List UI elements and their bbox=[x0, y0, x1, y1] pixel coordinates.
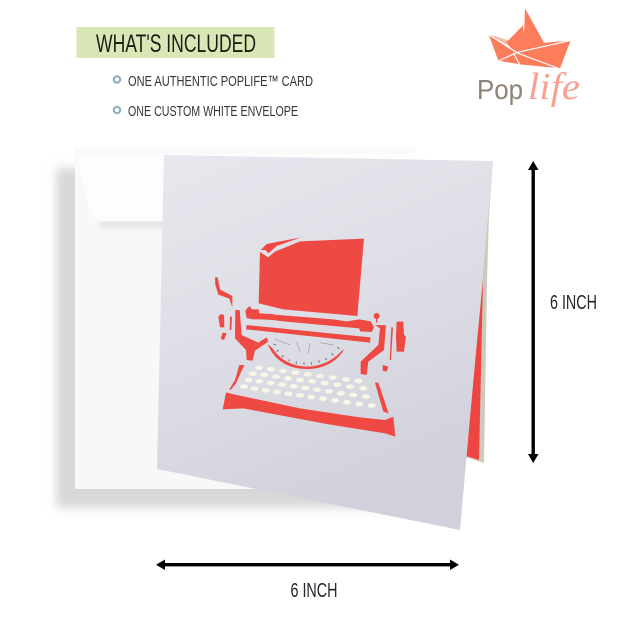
list of included items: ONE CUSTOM WHITE ENVELOPE bbox=[128, 103, 298, 120]
typewriter cut-out bbox=[215, 237, 406, 437]
keys bbox=[240, 365, 376, 408]
left sliver bbox=[230, 317, 232, 330]
list of included items bbox=[114, 73, 313, 120]
envelope shadow bbox=[56, 168, 406, 508]
carriage bar bbox=[246, 325, 371, 343]
envelope bbox=[75, 147, 415, 489]
heading: what's included: WHAT'S INCLUDED bbox=[96, 30, 256, 58]
card back edge bbox=[466, 161, 493, 463]
right small lever bbox=[383, 365, 388, 372]
logo: Poplife origami boat: life bbox=[528, 66, 580, 108]
dial crescent bbox=[268, 344, 344, 369]
arrow: width dimension bbox=[156, 560, 459, 570]
envelope flap bbox=[76, 154, 415, 221]
platen roller bbox=[245, 306, 374, 332]
right block bbox=[396, 322, 406, 352]
keyboard sides bbox=[229, 365, 244, 390]
card front bbox=[157, 155, 493, 530]
base bbox=[223, 392, 395, 437]
label: height 6 inch: 6 INCH bbox=[550, 292, 597, 314]
dial ticks bbox=[273, 339, 339, 365]
logo: Poplife origami boat bbox=[477, 8, 580, 108]
logo: Poplife origami boat: Pop bbox=[477, 74, 523, 105]
card inside red bbox=[466, 280, 483, 460]
left knob bbox=[218, 314, 224, 327]
paper bbox=[259, 239, 364, 316]
right frame bbox=[361, 325, 386, 375]
paper curl bbox=[261, 237, 301, 253]
heading: what's included bbox=[76, 27, 274, 58]
arrow: height dimension bbox=[528, 161, 538, 463]
left small lever bbox=[221, 333, 227, 340]
right sliver bbox=[390, 327, 393, 360]
right ball knob bbox=[374, 313, 380, 323]
list of included items: ONE AUTHENTIC POPLIFE™ CARD bbox=[128, 73, 313, 90]
left crank bbox=[215, 277, 232, 307]
label: width 6 inch: 6 INCH bbox=[290, 580, 338, 602]
left frame bbox=[235, 310, 268, 361]
